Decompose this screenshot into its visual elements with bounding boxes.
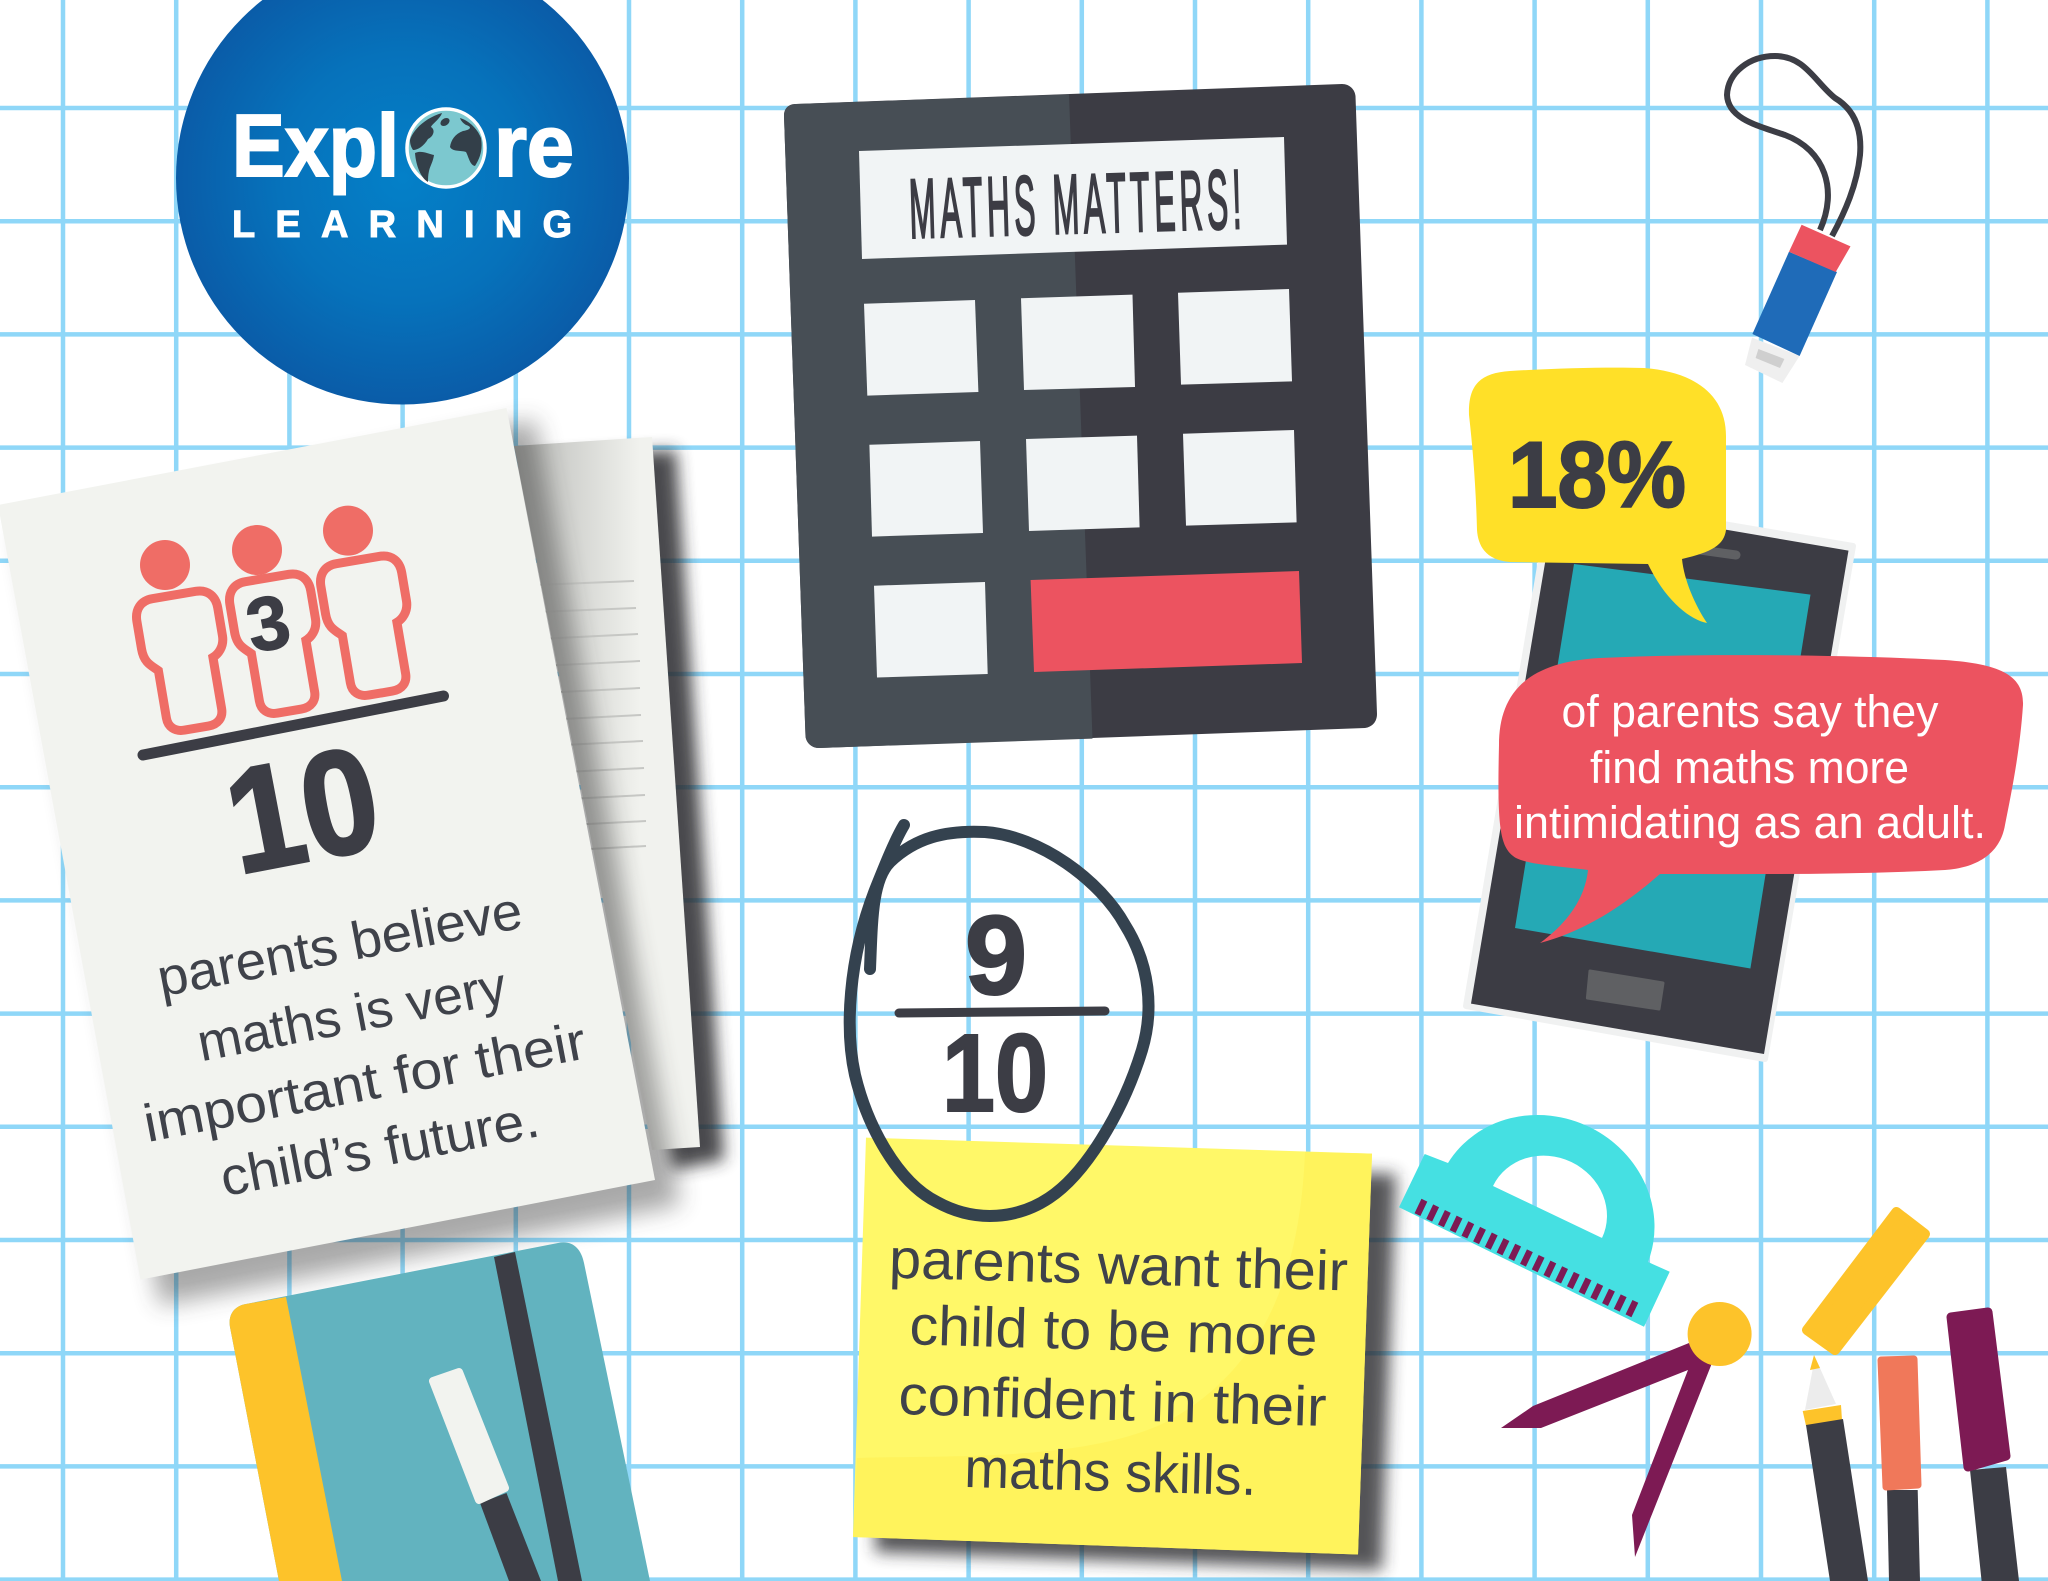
hand-drawn circle [850, 825, 1149, 1216]
statement text [888, 1227, 1349, 1507]
fraction bar [143, 696, 444, 755]
icon: globe [407, 109, 485, 187]
calculator shaded left half [784, 94, 1092, 748]
icon: pencil [1803, 1355, 1868, 1581]
statement text [1514, 686, 1986, 848]
logo wordmark left: Expl [232, 96, 399, 195]
USB connector slot [1756, 349, 1784, 368]
notebook spine [230, 1297, 342, 1581]
denominator 10: 10 [213, 715, 392, 905]
compass hinge [1688, 1302, 1752, 1366]
statement text: intimidating as an adult. [1514, 797, 1986, 848]
person outline right [318, 553, 421, 700]
calculator keys [864, 289, 1297, 678]
icon: three people [134, 506, 421, 735]
marker body [1970, 1467, 2019, 1581]
logo circle [176, 0, 629, 404]
statement text: parents believe [152, 881, 527, 1008]
statement text: parents want their [888, 1227, 1349, 1302]
numerator 3: 3 [239, 578, 297, 670]
panel: 3 in 10 parents on notebook page [0, 408, 724, 1305]
marker body [1887, 1490, 1920, 1581]
pen body [480, 1493, 541, 1581]
pencil body [1806, 1419, 1868, 1581]
sticky note [853, 1138, 1372, 1554]
USB connector [1745, 338, 1800, 383]
statement text: important for their [139, 1012, 591, 1154]
marker cap [1951, 1312, 2006, 1467]
icon: orange marker [1881, 1359, 1920, 1581]
notebook cover [230, 1242, 650, 1581]
protractor ticks [1418, 1206, 1637, 1311]
statement text [139, 881, 591, 1208]
red speech bubble [1498, 655, 2023, 943]
sticky note shadow [875, 1160, 1396, 1570]
numerator 9: 9 [965, 893, 1027, 1018]
back page [514, 437, 700, 1150]
statement text: of parents say they [1562, 686, 1939, 737]
calculator red key [1031, 571, 1302, 672]
statement text: maths is very [192, 956, 511, 1073]
back page shadow [535, 450, 724, 1170]
pencil band [1803, 1405, 1842, 1426]
denominator 10: 10 [942, 1012, 1048, 1135]
fraction bar [899, 1011, 1105, 1013]
USB body [1752, 252, 1837, 356]
front page shadow [20, 420, 680, 1305]
phone frame [1466, 495, 1853, 1059]
compass legs [1501, 1343, 1712, 1557]
statement text: confident in their [898, 1363, 1327, 1438]
logo subtitle: LEARNING [232, 204, 572, 246]
panel: 9 in 10 parents on sticky note [850, 825, 1396, 1570]
person outline middle [227, 571, 330, 718]
protractor body [1399, 1115, 1670, 1327]
icon: USB stick [1727, 56, 1860, 383]
back page ruled lines [535, 581, 646, 851]
icon: protractor [1399, 1115, 1670, 1327]
pencil tip [1805, 1357, 1836, 1410]
phone speaker [1700, 550, 1736, 555]
logo: Explore Learning [176, 0, 629, 404]
phone body [1471, 501, 1848, 1054]
statement text: child’s future. [216, 1090, 544, 1208]
phone screen [1515, 564, 1810, 968]
front page [0, 408, 655, 1280]
icon: calculator [784, 84, 1377, 748]
person heads [140, 506, 373, 590]
notebook elastic band [494, 1252, 582, 1581]
logo wordmark right: re [494, 96, 574, 195]
icon: compass [1501, 1302, 1752, 1557]
USB red band [1789, 225, 1850, 272]
person outline left [134, 588, 237, 735]
statement text: child to be more [909, 1293, 1318, 1368]
USB cord [1727, 56, 1860, 236]
icon: purple marker [1951, 1312, 2019, 1581]
18% figure: 18% [1508, 422, 1686, 527]
yellow speech bubble [1469, 368, 1726, 623]
phone home button [1587, 971, 1663, 1009]
sticky note fold shading [853, 1152, 1372, 1554]
statement text: find maths more [1590, 742, 1909, 793]
panel: 18% of parents on phone [1466, 368, 2023, 1059]
pen cap [433, 1372, 505, 1500]
marker cap [1881, 1359, 1918, 1487]
icon: yellow eraser [1807, 1212, 1925, 1350]
icon: notebook [230, 1242, 650, 1581]
pencil lead [1810, 1355, 1820, 1370]
calculator title: MATHS MATTERS! [908, 153, 1243, 256]
calculator body [784, 84, 1377, 748]
statement text: maths skills. [964, 1436, 1257, 1507]
calculator display [859, 137, 1287, 259]
